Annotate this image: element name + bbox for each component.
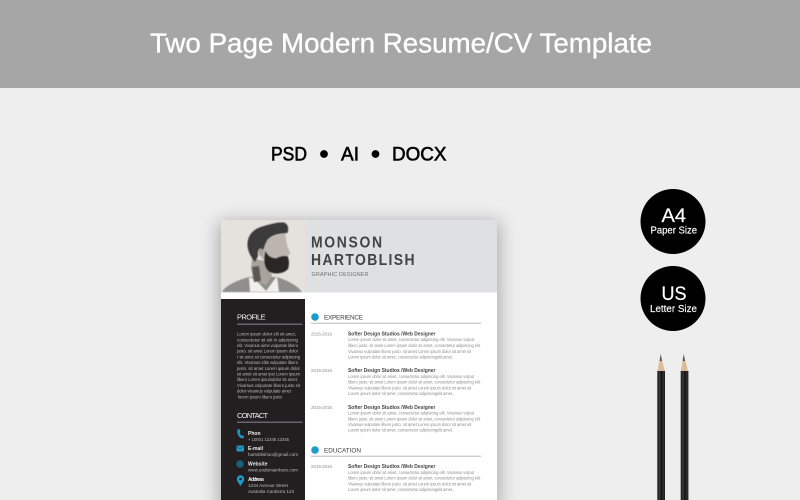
contact: phone: Phon	[248, 431, 260, 437]
contact heading: CONTACT	[237, 411, 268, 420]
sweater	[222, 277, 302, 292]
contact: website: www.undomainhere.com	[248, 467, 298, 472]
contact: address: 1234 Avenue Street	[248, 483, 289, 488]
experience entry 3: 2015-2016	[311, 405, 332, 410]
badge: US letter size: US	[662, 284, 686, 305]
contact: phone: + 10001 12345 12345	[248, 437, 289, 442]
contact: email	[236, 446, 298, 457]
experience entry 1: Lorem ipsum dolor sit amet, consectetur adipiscingelit.amet.	[348, 354, 453, 360]
profile text: libero Lorem ipsumdolor sit amet.	[237, 377, 298, 382]
contact: email: E-mail	[248, 446, 264, 452]
profile text: elit. Vivamus aims vulputate libero	[237, 343, 298, 348]
format list: PSD, AI, DOCX: DOCX	[392, 144, 446, 166]
profile text: elit. Vivamus elits vulputate libero	[237, 360, 298, 365]
experience entry 1: Lorem ipsum dolor sit amet, consectetur adipiscing elit. Vivamus vulput	[348, 337, 475, 342]
hair	[247, 222, 288, 262]
experience entry 2: 2015-2016	[311, 368, 332, 373]
format list: PSD, AI, DOCX: AI	[341, 144, 359, 166]
contact: address: Address	[248, 477, 264, 483]
education entry: libero justo. sit amet Lorem ipsum dolor sit amet, consectetur adipiscing elit.	[348, 476, 481, 481]
experience entry 2: Lorem ipsum dolor sit amet, consectetur adipiscingelit.amet.	[348, 391, 453, 396]
education entry: Vivamus vulputate libero justo. sit amet Lorem ipsum dolor sit amet sit	[348, 481, 472, 486]
badge: A4 paper size	[640, 189, 706, 254]
neck	[251, 258, 272, 285]
education entry	[311, 464, 481, 492]
profile text: sit amet sit amet ipsi Lorem ipsum	[237, 372, 300, 376]
profile text: Vivamus vulputate libero justo sit	[237, 383, 301, 388]
experience entry 2: Softer Design Studios /Web Designer	[348, 368, 436, 374]
profile text: lorem ipsum libero justo	[238, 394, 282, 399]
profile text: r sit amet sit consectetur adipiscing	[237, 354, 300, 359]
name	[311, 235, 415, 269]
profile text: justo. sit amet Lorem ipsum dolor	[236, 349, 298, 354]
experience entry 1: libero justo. sit amet Lorem ipsum dolor sit amet, consectetur adipiscing elit.	[348, 343, 481, 348]
format list: PSD, AI, DOCX: PSD	[271, 144, 307, 166]
badge: A4 paper size: A4	[662, 206, 686, 227]
profile heading: PROFILE	[237, 313, 266, 322]
resume page	[221, 220, 497, 500]
resume page shadow	[219, 222, 499, 500]
contact: phone	[237, 429, 289, 442]
contact: address	[237, 475, 294, 494]
experience entry 3	[311, 405, 481, 433]
experience heading: EXPERIENCE	[324, 314, 363, 321]
tattoo	[252, 266, 261, 282]
experience entry 1: Vivamus vulputate libero justo. sit amet Lorem ipsum dolor sit amet sit	[348, 349, 472, 354]
title: Two Page Modern Resume/CV Template	[150, 28, 652, 58]
face	[260, 232, 290, 268]
education entry: Lorem ipsum dolor sit amet, consectetur adipiscing elit. Vivamus vulput	[348, 470, 475, 475]
education section	[311, 446, 481, 492]
profile text: justo. sit amet Lorem ipsum dolor	[236, 366, 300, 371]
icon: education	[311, 446, 319, 454]
experience entry 3: Lorem ipsum dolor sit amet, consectetur adipiscing elit. Vivamus vulput	[348, 411, 475, 416]
experience entry 3: Softer Design Studios /Web Designer	[348, 405, 436, 411]
education entry: Lorem ipsum dolor sit amet, consectetur adipiscingelit.amet.	[348, 487, 453, 492]
format list: PSD, AI, DOCX	[271, 144, 446, 166]
experience entry 2: libero justo. sit amet Lorem ipsum dolor sit amet, consectetur adipiscing elit.	[348, 380, 481, 385]
header band	[0, 0, 800, 88]
badge: US letter size: Letter Size	[650, 303, 697, 315]
experience entry 1	[311, 332, 481, 360]
sidebar panel	[221, 299, 305, 500]
profile text: dolor vivamus vulputate amet	[237, 389, 292, 394]
contact: website: Website	[248, 461, 268, 467]
shirt	[249, 276, 279, 292]
name: HARTOBLISH	[311, 252, 415, 269]
portrait	[221, 220, 306, 292]
experience entry 2: Vivamus vulputate libero justo. sit amet Lorem ipsum dolor sit amet sit	[348, 386, 472, 390]
icon: experience	[311, 313, 319, 321]
experience entry 2	[311, 368, 481, 396]
contact: website	[236, 460, 298, 472]
experience entry 3: libero justo. sit amet Lorem ipsum dolor sit amet, consectetur adipiscing elit.	[348, 416, 481, 421]
job title: GRAPHIC DESIGNER	[312, 272, 369, 278]
ear	[258, 248, 264, 256]
name: MONSON	[311, 235, 382, 252]
badge: A4 paper size: Paper Size	[650, 224, 697, 236]
profile text: Lorem ipsum dolor elit sit amet,	[237, 332, 296, 337]
experience entry 3: Vivamus vulputate libero justo. sit amet Lorem ipsum dolor sit amet sit	[348, 422, 472, 427]
resume header panel	[305, 220, 497, 292]
experience section	[311, 313, 481, 433]
profile text	[236, 332, 301, 399]
experience entry 1: Softer Design Studios /Web Designer	[348, 332, 436, 338]
beard	[264, 251, 289, 273]
education entry: 2015-2016	[311, 464, 332, 469]
contact: address: Australia Canberra 123	[248, 489, 294, 494]
profile text: consectetur sit elit in adipiscing	[237, 337, 298, 342]
contact: email: hartoblishoo@gmail.com	[248, 452, 298, 457]
experience entry 3: Lorem ipsum dolor sit amet, consectetur adipiscingelit.amet.	[348, 428, 453, 433]
education entry: Softer Design Studios /Web Designer	[348, 464, 436, 470]
experience entry 2: Lorem ipsum dolor sit amet, consectetur adipiscing elit. Vivamus vulput	[348, 374, 475, 379]
icon: pencils	[657, 354, 688, 500]
education heading: EDUCATION	[324, 447, 361, 454]
experience entry 1: 2015-2016	[311, 332, 332, 336]
badge: US letter size	[640, 266, 706, 331]
